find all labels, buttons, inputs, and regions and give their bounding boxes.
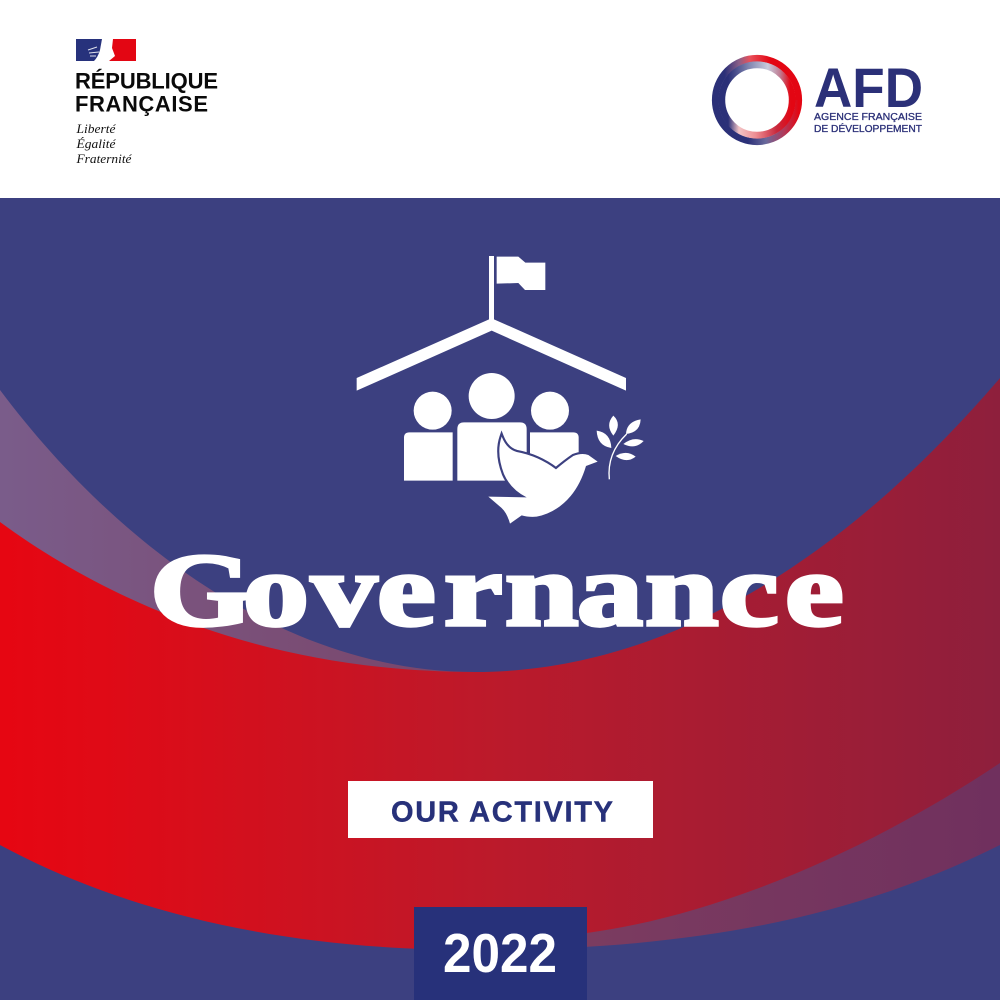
- olive branch: [597, 416, 644, 479]
- translucent swoosh: lower right: [475, 763, 1000, 950]
- label box: our activity: [348, 781, 653, 838]
- white header band: [0, 0, 1000, 198]
- year box: 2022: [414, 907, 587, 1000]
- icon: tricolour flag: [76, 39, 136, 61]
- logo: République Française: [75, 39, 218, 166]
- AFD full name: AGENCE FRANÇAISE: [814, 112, 922, 123]
- three people: [404, 373, 579, 481]
- logo: AFD: DE DÉVELOPPEMENT: [814, 122, 923, 135]
- label box: our activity: OUR ACTIVITY: [391, 796, 613, 828]
- icon: governance house with people, dove and olive branch: [357, 256, 644, 524]
- motto: [75, 121, 133, 166]
- République Française wordmark: RÉPUBLIQUE: [75, 68, 218, 94]
- motto: Égalité: [75, 136, 117, 151]
- title: Governance: [150, 532, 844, 648]
- roof: [357, 319, 626, 391]
- logo: République Française: FRANÇAISE: [75, 92, 208, 116]
- translucent swoosh: upper left: [0, 390, 475, 700]
- motto: Liberté: [75, 121, 117, 136]
- icon: AFD ring: [715, 58, 799, 142]
- AFD wordmark: AFD: [814, 56, 923, 119]
- dove: [488, 437, 598, 524]
- flag and pole: [489, 256, 545, 321]
- motto: Fraternité: [75, 151, 133, 166]
- red gradient wave band: [0, 378, 1000, 950]
- year box: 2022: 2022: [443, 922, 557, 984]
- logo: AFD: [715, 56, 923, 142]
